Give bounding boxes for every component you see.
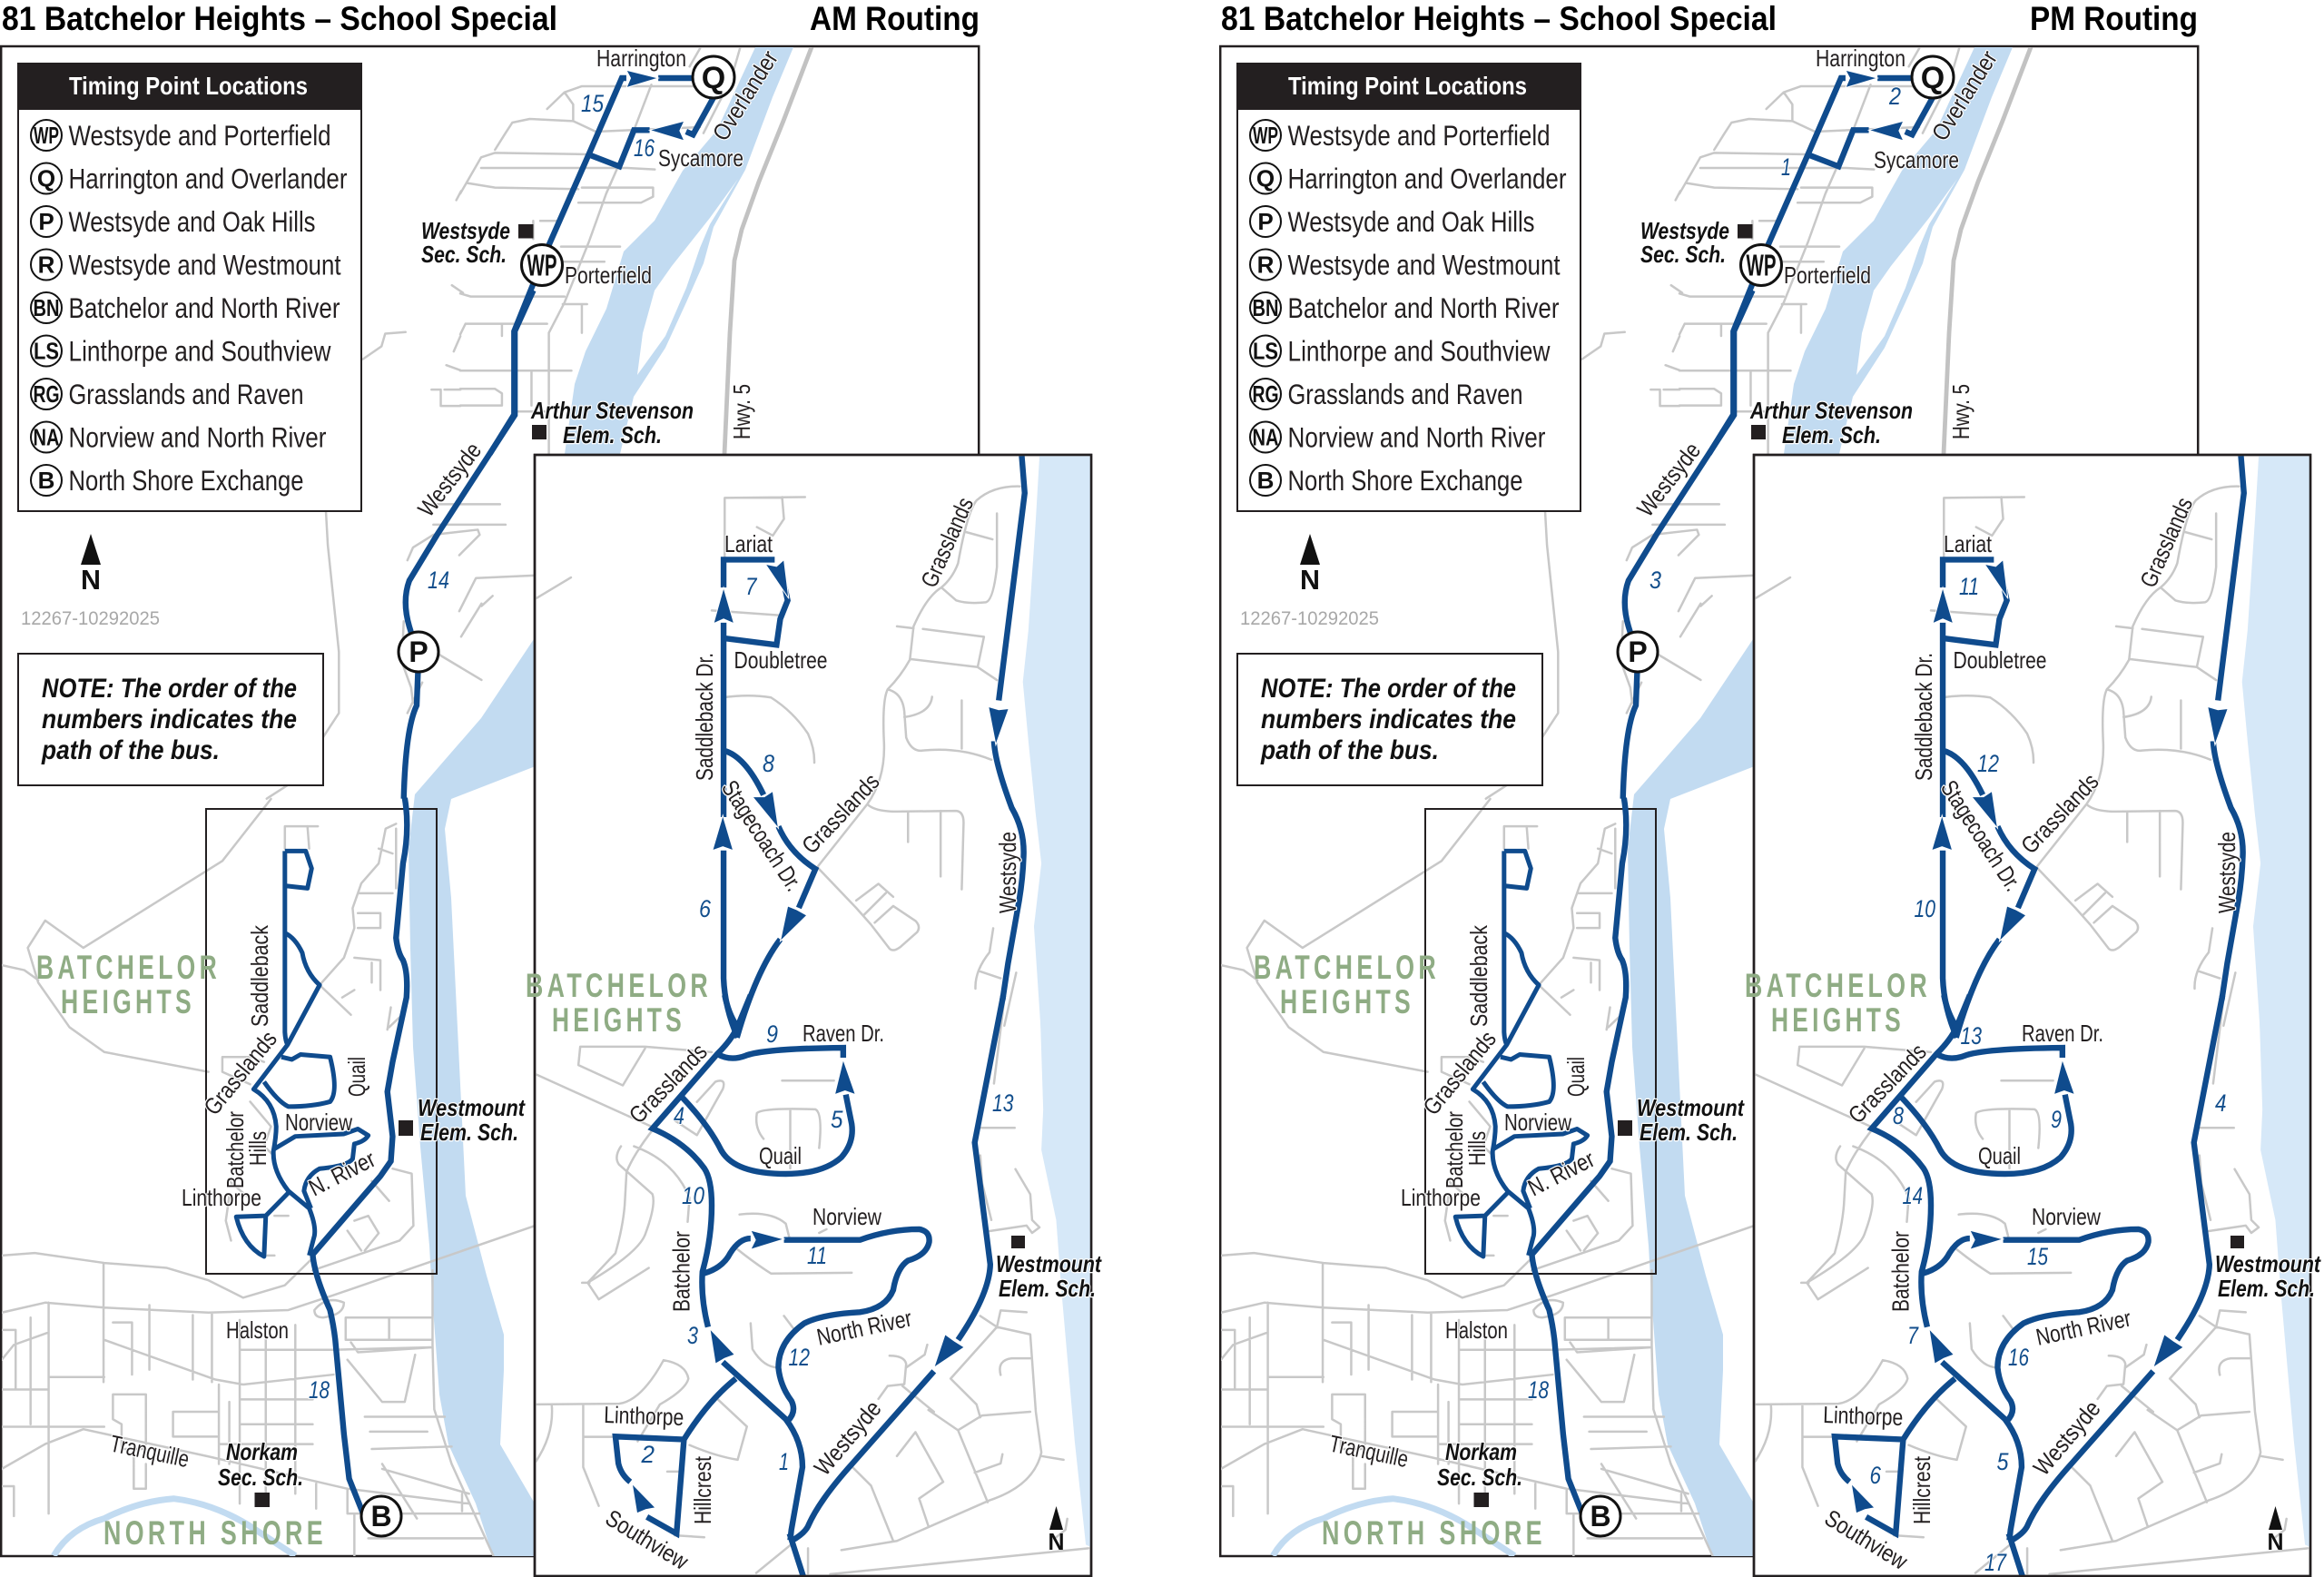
inset street labels: North River xyxy=(814,1304,914,1351)
street labels: Overlander xyxy=(707,45,783,145)
icon: inset north arrow xyxy=(2268,1506,2284,1555)
legend: timing point locations: B xyxy=(38,467,54,494)
legend: timing point locations: LS xyxy=(34,338,59,365)
route sequence numbers: 3 xyxy=(1649,567,1661,594)
street labels: N. River xyxy=(1523,1145,1599,1201)
timing points on map xyxy=(1581,56,1954,1536)
legend: timing point locations: Batchelor and North River xyxy=(69,291,340,324)
inset route sequence numbers: 8 xyxy=(763,750,774,777)
schools: Elem. Sch. xyxy=(420,1119,518,1146)
street labels: Linthorpe xyxy=(182,1184,261,1211)
inset route sequence numbers: 14 xyxy=(1903,1182,1923,1209)
inset route sequence numbers: 1 xyxy=(779,1448,789,1475)
inset street labels: Grasslands xyxy=(2015,768,2104,859)
legend: timing point locations xyxy=(17,64,362,511)
street labels: Norview xyxy=(1504,1109,1571,1136)
icon: north arrow: N xyxy=(81,564,101,596)
inset street labels: Quail xyxy=(1978,1142,2021,1169)
schools: Sec. Sch. xyxy=(1640,241,1726,268)
inset school: Westmount xyxy=(2215,1236,2321,1302)
schools: Westmount xyxy=(418,1094,526,1121)
legend: timing point locations: BN xyxy=(33,294,60,321)
inset street labels: Stagecoach Dr. xyxy=(716,775,808,896)
inset place label: Batchelor Heights: BATCHELOR xyxy=(1745,967,1931,1004)
inset route sequence numbers: 7 xyxy=(1907,1322,1919,1349)
timing points on map: P xyxy=(1628,636,1648,668)
place label: Batchelor Heights: BATCHELOR xyxy=(1254,949,1440,986)
street labels: Saddleback xyxy=(246,924,273,1027)
legend: timing point locations: RG xyxy=(33,380,60,408)
timing points on map: Q xyxy=(1921,61,1945,95)
route sequence numbers: 14 xyxy=(428,567,449,594)
inset map: river, roads and bus route xyxy=(1746,456,2312,1577)
inset route sequence numbers: 12 xyxy=(788,1344,810,1371)
inset street labels: Raven Dr. xyxy=(803,1020,884,1047)
icon: inset north arrow: N xyxy=(1048,1528,1064,1555)
overview map: river, roads and bus route xyxy=(1221,47,2031,1556)
icon: north arrow xyxy=(1300,534,1320,596)
legend: timing point locations: Harrington and Overlander xyxy=(1287,162,1567,194)
timing points on map: WP xyxy=(1747,249,1776,281)
street labels: Quail xyxy=(1562,1057,1590,1097)
inset street labels: Batchelor xyxy=(1886,1231,1914,1312)
callout: note xyxy=(18,654,323,785)
inset route sequence numbers: 3 xyxy=(687,1322,698,1349)
inset street labels: Lariat xyxy=(724,530,773,557)
inset street labels: Doubletree xyxy=(734,646,828,674)
inset place label: Batchelor Heights: BATCHELOR xyxy=(526,967,712,1004)
inset route sequence numbers: 13 xyxy=(1961,1022,1982,1050)
legend: timing point locations: Harrington and Overlander xyxy=(69,162,347,194)
legend: timing point locations: Grasslands and Raven xyxy=(1287,378,1523,410)
inset street labels: Quail xyxy=(759,1142,802,1169)
inset route sequence numbers: 10 xyxy=(682,1182,704,1209)
inset route sequence numbers: 9 xyxy=(2051,1106,2062,1133)
inset place label: Batchelor Heights xyxy=(1745,967,1931,1039)
place label: Batchelor Heights xyxy=(36,949,221,1020)
inset street labels: Grasslands xyxy=(1843,1038,1932,1129)
legend: timing point locations: RG xyxy=(1253,380,1278,408)
route sequence numbers: 15 xyxy=(581,90,605,117)
legend: timing point locations: Timing Point Locations xyxy=(69,72,308,100)
inset street labels: Grasslands xyxy=(2134,493,2198,591)
timing points on map: Q xyxy=(702,61,725,95)
schools: Norkam xyxy=(1445,1438,1517,1465)
inset school: Westmount xyxy=(996,1236,1102,1302)
street labels: Hills xyxy=(244,1131,271,1166)
street labels: Grasslands xyxy=(1417,1025,1502,1120)
timing points on map: WP xyxy=(527,249,557,281)
overview map: river, roads and bus route xyxy=(2,47,812,1556)
legend: timing point locations: Timing Point Locations xyxy=(1288,72,1527,100)
route sequence numbers: 2 xyxy=(1888,83,1901,110)
map frame xyxy=(1220,46,2198,1556)
legend: timing point locations: P xyxy=(38,208,54,235)
inset street labels: Hillcrest xyxy=(1908,1455,1935,1524)
route sequence numbers: 16 xyxy=(634,134,655,162)
callout: note: numbers indicates the xyxy=(1261,705,1516,734)
inset place label: Batchelor Heights: HEIGHTS xyxy=(1771,1001,1905,1039)
inset route sequence numbers: 15 xyxy=(2027,1243,2049,1270)
inset street labels: Westsyde xyxy=(994,832,1021,913)
street labels: Batchelor xyxy=(1441,1111,1468,1188)
schools xyxy=(1437,217,1913,1507)
timing points on map: B xyxy=(1590,1500,1611,1533)
inset street labels: Westsyde xyxy=(2213,832,2240,913)
schools: Norkam xyxy=(226,1438,298,1465)
street labels: Harrington xyxy=(1816,44,1905,72)
inset route sequence numbers: 11 xyxy=(807,1242,827,1269)
panel: AM routing xyxy=(1,0,1102,1577)
legend: timing point locations: Westsyde and Oak Hills xyxy=(69,205,316,238)
inset map: river, roads and bus route xyxy=(527,456,1093,1577)
map code: 12267-10292025 xyxy=(1240,608,1379,629)
panel: PM routing xyxy=(1220,0,2321,1577)
place label: Batchelor Heights: HEIGHTS xyxy=(1280,983,1414,1020)
inset street labels: Westsyde xyxy=(2028,1395,2106,1481)
inset street labels: Norview xyxy=(812,1203,881,1230)
street labels: Batchelor xyxy=(222,1111,249,1188)
street labels xyxy=(1327,44,2003,1473)
schools xyxy=(218,217,694,1507)
route sequence numbers: 18 xyxy=(1528,1376,1549,1404)
legend: timing point locations: Westsyde and Westmount xyxy=(69,249,341,281)
street labels: Hwy. 5 xyxy=(1947,384,1974,439)
street labels: N. River xyxy=(304,1145,379,1201)
legend: timing point locations: Westsyde and Oak Hills xyxy=(1287,205,1534,238)
legend: timing point locations xyxy=(1236,64,1581,511)
inset route sequence numbers: 13 xyxy=(992,1089,1013,1117)
street labels: Tranquille xyxy=(1327,1430,1411,1473)
legend: timing point locations: Q xyxy=(1256,165,1275,192)
legend: timing point locations: Westsyde and Porterfield xyxy=(1287,119,1551,152)
schools: Westsyde xyxy=(1640,217,1729,244)
legend: timing point locations: Q xyxy=(37,165,55,192)
legend: timing point locations: Linthorpe and Southview xyxy=(69,334,331,367)
inset route sequence numbers: 8 xyxy=(1893,1102,1904,1129)
inset street labels: Grasslands xyxy=(915,493,979,591)
inset street labels: Norview xyxy=(2032,1203,2101,1230)
legend: timing point locations: P xyxy=(1257,208,1274,235)
timing points on map: B xyxy=(370,1500,392,1533)
street labels: Norview xyxy=(285,1109,352,1136)
panel: PM inset map xyxy=(1745,455,2321,1577)
legend: timing point locations: WP xyxy=(34,122,59,149)
inset route sequence numbers: 11 xyxy=(1959,573,1979,600)
place label: North Shore: NORTH SHORE xyxy=(1322,1514,1546,1552)
street labels: Overlander xyxy=(1926,45,2003,145)
inset route sequence numbers: 9 xyxy=(766,1020,778,1048)
legend: timing point locations: B xyxy=(1257,467,1274,494)
inset route sequence numbers: 4 xyxy=(674,1102,684,1129)
inset street labels: Lariat xyxy=(1944,530,1993,557)
street labels: Grasslands xyxy=(198,1025,282,1120)
schools: Westmount xyxy=(1637,1094,1745,1121)
schools: Sec. Sch. xyxy=(218,1464,303,1491)
schools: Elem. Sch. xyxy=(1782,421,1881,448)
street labels: Westsyde xyxy=(412,437,487,522)
inset street labels: Grasslands xyxy=(796,768,885,859)
inset street labels xyxy=(601,493,1021,1575)
map heading: PM routing: PM Routing xyxy=(2030,0,2198,37)
legend: timing point locations: Norview and North River xyxy=(69,421,327,454)
schools: Elem. Sch. xyxy=(563,421,662,448)
legend: timing point locations: North Shore Exchange xyxy=(69,464,303,497)
icon: inset north arrow: N xyxy=(2268,1528,2284,1555)
street labels: Westsyde xyxy=(1631,437,1706,522)
street labels: Porterfield xyxy=(565,261,652,289)
map heading: route title: 81 Batchelor Heights – School Special xyxy=(1221,0,1777,37)
inset school: Westmount: Westmount xyxy=(996,1250,1102,1277)
place label: Batchelor Heights xyxy=(1254,949,1440,1020)
legend: timing point locations: Grasslands and Raven xyxy=(69,378,303,410)
inset route sequence numbers: 12 xyxy=(1977,750,1999,777)
inset street labels: Stagecoach Dr. xyxy=(1935,775,2027,896)
route sequence numbers: 1 xyxy=(1781,153,1791,181)
timing points on map xyxy=(361,56,734,1536)
place label: Batchelor Heights: HEIGHTS xyxy=(61,983,195,1020)
inset street labels: Saddleback Dr. xyxy=(691,653,718,781)
inset route sequence numbers: 4 xyxy=(2215,1089,2226,1117)
inset street labels: Linthorpe xyxy=(604,1401,684,1431)
inset street labels: Linthorpe xyxy=(1823,1401,1904,1431)
legend: timing point locations: Batchelor and North River xyxy=(1287,291,1560,324)
street labels: Hwy. 5 xyxy=(728,384,755,439)
street labels: Harrington xyxy=(596,44,686,72)
icon: inset north arrow xyxy=(1048,1506,1064,1555)
icon: north arrow xyxy=(81,534,101,596)
callout: note: NOTE: The order of the xyxy=(42,674,297,704)
map code: 12267-10292025 xyxy=(21,608,160,629)
inset place label: Batchelor Heights xyxy=(526,967,712,1039)
inset place label: Batchelor Heights: HEIGHTS xyxy=(552,1001,685,1039)
callout: note: path of the bus. xyxy=(41,735,220,765)
inset street labels: Grasslands xyxy=(624,1038,713,1129)
route sequence numbers xyxy=(1528,83,1901,1404)
map heading: AM routing: AM Routing xyxy=(810,0,980,37)
inset route sequence numbers: 6 xyxy=(699,895,712,922)
icon: north arrow: N xyxy=(1300,564,1320,596)
schools: Sec. Sch. xyxy=(421,241,507,268)
schools: Arthur Stevenson xyxy=(530,397,694,424)
inset route sequence numbers: 10 xyxy=(1914,895,1935,922)
callout: note: numbers indicates the xyxy=(42,705,297,734)
schools: Elem. Sch. xyxy=(1640,1119,1738,1146)
inset street labels: Raven Dr. xyxy=(2022,1020,2103,1047)
timing points on map: P xyxy=(409,636,428,668)
inset street labels: Westsyde xyxy=(809,1395,887,1481)
inset street labels xyxy=(1820,493,2240,1575)
map frame xyxy=(1,46,979,1556)
inset street labels: Saddleback Dr. xyxy=(1910,653,1937,781)
legend: timing point locations: Linthorpe and Southview xyxy=(1287,334,1551,367)
schools: Sec. Sch. xyxy=(1437,1464,1522,1491)
schools: Westsyde xyxy=(421,217,510,244)
route sequence numbers: 18 xyxy=(309,1376,330,1404)
inset school: Westmount: Elem. Sch. xyxy=(999,1275,1096,1302)
legend: timing point locations: LS xyxy=(1253,338,1278,365)
inset route sequence numbers: 7 xyxy=(745,573,757,600)
inset street labels: North River xyxy=(2034,1304,2133,1351)
inset route sequence numbers: 6 xyxy=(1870,1462,1882,1489)
street labels xyxy=(108,44,783,1473)
inset street labels: Hillcrest xyxy=(689,1455,716,1524)
inset route sequence numbers: 5 xyxy=(831,1106,843,1133)
street labels: Tranquille xyxy=(108,1430,192,1473)
inset route sequence numbers: 5 xyxy=(1997,1448,2009,1475)
callout: note: NOTE: The order of the xyxy=(1261,674,1516,704)
callout: note: path of the bus. xyxy=(1260,735,1439,765)
callout: note xyxy=(1237,654,1542,785)
place label: Batchelor Heights: BATCHELOR xyxy=(36,949,221,986)
inset route sequence numbers xyxy=(1870,573,2226,1576)
street labels: Saddleback xyxy=(1465,924,1492,1027)
legend: timing point locations: BN xyxy=(1253,294,1278,321)
inset route sequence numbers: 17 xyxy=(1984,1549,2007,1576)
place label: North Shore: NORTH SHORE xyxy=(103,1514,327,1552)
schools: Arthur Stevenson xyxy=(1749,397,1913,424)
legend: timing point locations: Westsyde and Westmount xyxy=(1287,249,1561,281)
legend: timing point locations: NA xyxy=(1253,423,1279,450)
inset route sequence numbers: 16 xyxy=(2008,1344,2030,1371)
legend: timing point locations: NA xyxy=(33,423,60,450)
legend: timing point locations: R xyxy=(38,251,55,278)
street labels: Hills xyxy=(1463,1131,1491,1166)
street labels: Linthorpe xyxy=(1401,1184,1481,1211)
street labels: Porterfield xyxy=(1784,261,1871,289)
inset route sequence numbers xyxy=(641,573,1013,1475)
street labels: Halston xyxy=(1445,1316,1508,1344)
inset street labels: Doubletree xyxy=(1954,646,2046,674)
route sequence numbers xyxy=(309,90,655,1404)
street labels: Halston xyxy=(226,1316,289,1344)
panel: AM inset map xyxy=(526,455,1102,1577)
legend: timing point locations: Norview and North River xyxy=(1287,421,1545,454)
legend: timing point locations: WP xyxy=(1253,122,1278,149)
map heading: route title: 81 Batchelor Heights – School Special xyxy=(2,0,557,37)
legend: timing point locations: R xyxy=(1257,251,1275,278)
street labels: Quail xyxy=(343,1057,370,1097)
legend: timing point locations: North Shore Exchange xyxy=(1287,464,1523,497)
legend: timing point locations: Westsyde and Porterfield xyxy=(69,119,330,152)
inset street labels: Batchelor xyxy=(668,1231,695,1312)
street labels: Sycamore xyxy=(1874,146,1959,173)
street labels: Sycamore xyxy=(658,144,743,172)
inset route sequence numbers: 2 xyxy=(641,1441,655,1468)
